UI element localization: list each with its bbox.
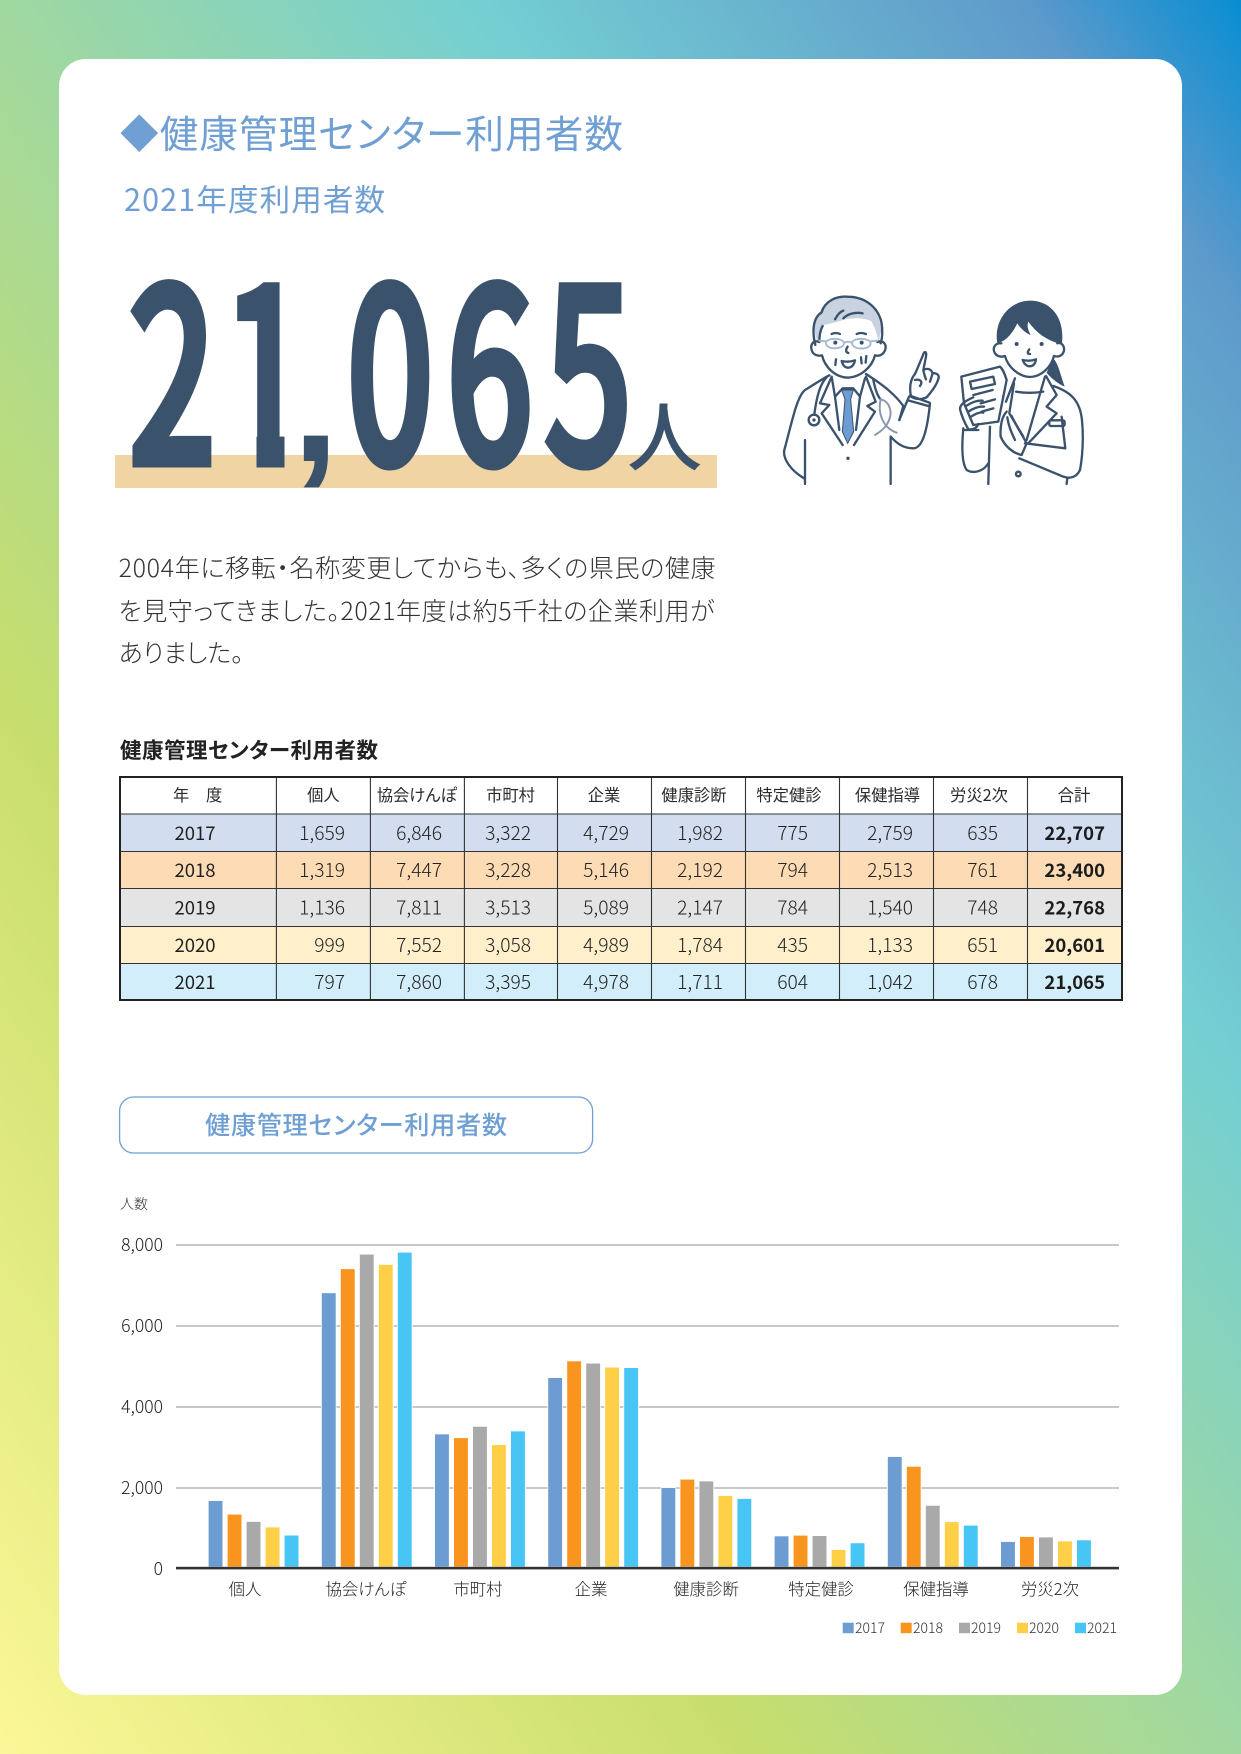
chart heading pill: 健康管理センター利用者数 <box>205 1106 507 1142</box>
row 2017 <box>174 818 1105 846</box>
row 2018: 2,513 <box>867 855 913 883</box>
bars: 個人 <box>208 1501 299 1567</box>
y axis labels: 2,000 <box>121 1475 163 1500</box>
y axis labels: 8,000 <box>121 1232 163 1257</box>
row 2018 <box>174 855 1105 883</box>
intro paragraph: 2004年に移転・名称変更してからも、多くの県民の健康 <box>119 549 716 585</box>
row 2017: 2017 <box>174 820 216 846</box>
category labels: 企業 <box>575 1576 607 1600</box>
row 2017: 6,846 <box>396 818 442 846</box>
header row: 市町村 <box>486 782 535 806</box>
row backgrounds <box>120 777 1122 1000</box>
x axis baseline <box>176 1567 1119 1569</box>
row 2020: 3,058 <box>485 930 531 958</box>
row 2017: 2,759 <box>867 818 913 846</box>
bars: 市町村 <box>435 1426 525 1567</box>
header row: 合計 <box>1058 782 1090 806</box>
row 2020: 7,552 <box>396 930 442 958</box>
bars: 特定健診 <box>774 1535 865 1567</box>
row 2018: 3,228 <box>485 855 531 883</box>
row 2021: 3,395 <box>485 967 531 995</box>
row 2017: 775 <box>777 818 808 846</box>
header row: 労災2次 <box>950 782 1008 806</box>
row 2021: 2021 <box>174 969 216 995</box>
row 2020: 20,601 <box>1044 932 1105 958</box>
row 2021: 4,978 <box>583 967 629 995</box>
legend <box>843 1618 1117 1638</box>
category labels: 協会けんぽ <box>326 1576 407 1600</box>
row 2019: 22,768 <box>1044 894 1105 920</box>
row 2020: 1,784 <box>677 930 723 958</box>
data table <box>120 777 1122 1000</box>
legend: 2017 <box>855 1618 885 1638</box>
y axis labels: 6,000 <box>121 1313 163 1338</box>
row 2020: 1,133 <box>867 930 913 958</box>
row 2020 <box>174 930 1105 958</box>
row 2020: 4,989 <box>583 930 629 958</box>
legend: 2020 <box>1029 1618 1059 1638</box>
bar chart <box>120 1194 1119 1638</box>
intro paragraph: を見守ってきました。2021年度は約5千社の企業利用が <box>119 592 715 628</box>
category labels: 健康診断 <box>673 1576 739 1600</box>
category labels: 個人 <box>229 1576 261 1600</box>
row 2019: 3,513 <box>485 892 531 920</box>
row 2021: 1,042 <box>867 967 913 995</box>
row 2020: 2020 <box>174 932 216 958</box>
unit: person: 人 <box>627 378 702 487</box>
row 2018: 794 <box>777 855 808 883</box>
row 2021: 21,065 <box>1044 969 1105 995</box>
row 2019: 1,540 <box>867 892 913 920</box>
row 2019: 748 <box>967 892 998 920</box>
illustration: doctor and nurse <box>784 297 1083 484</box>
number 21,065: 2065 <box>130 189 631 530</box>
legend: 2021 <box>1087 1618 1117 1638</box>
number 21,065: , <box>292 308 339 498</box>
row 2019: 7,811 <box>396 892 442 920</box>
row 2018: 23,400 <box>1044 857 1105 883</box>
row 2021: 678 <box>967 967 998 995</box>
row 2019: 2,147 <box>677 892 723 920</box>
subtitle: 2021 fiscal year users: 2021年度利用者数 <box>124 176 385 220</box>
row 2017: 1,659 <box>299 818 345 846</box>
row 2021 <box>174 967 1105 995</box>
number 21,065: 1 <box>223 189 308 530</box>
category labels: 労災2次 <box>1021 1576 1079 1600</box>
row 2018: 2,192 <box>677 855 723 883</box>
row 2017: 4,729 <box>583 818 629 846</box>
legend: 2019 <box>971 1618 1001 1638</box>
bars: 企業 <box>548 1361 638 1567</box>
row 2018: 1,319 <box>299 855 345 883</box>
category labels: 市町村 <box>453 1576 503 1600</box>
header row: 協会けんぽ <box>377 782 458 806</box>
highlight bar <box>115 455 717 488</box>
y axis labels: 4,000 <box>121 1394 163 1419</box>
row 2017: 3,322 <box>485 818 531 846</box>
row 2021: 604 <box>777 967 808 995</box>
table heading: 健康管理センター利用者数 <box>120 734 378 765</box>
row 2018: 761 <box>967 855 998 883</box>
row 2019: 2019 <box>174 894 216 920</box>
header row: 健康診断 <box>661 782 727 806</box>
doctor <box>784 297 939 484</box>
legend: 2018 <box>913 1618 943 1638</box>
header row: 保健指導 <box>855 782 920 806</box>
number 21,065 <box>130 279 627 488</box>
intro paragraph <box>119 549 716 670</box>
row 2017: 22,707 <box>1044 820 1105 846</box>
header row: 企業 <box>588 782 620 806</box>
row 2019: 5,089 <box>583 892 629 920</box>
bars: 協会けんぽ <box>321 1252 412 1567</box>
row 2018: 5,146 <box>583 855 629 883</box>
row 2019: 784 <box>777 892 808 920</box>
category labels <box>229 1576 1079 1600</box>
category labels: 保健指導 <box>903 1576 969 1600</box>
row 2019 <box>174 892 1105 920</box>
row 2020: 999 <box>314 930 345 958</box>
bars: 保健指導 <box>887 1457 978 1567</box>
bars: 労災2次 <box>1001 1537 1091 1567</box>
row 2020: 651 <box>967 930 998 958</box>
big number callout <box>115 279 717 488</box>
y axis unit: 人数 <box>120 1194 148 1214</box>
row 2017: 1,982 <box>677 818 723 846</box>
category labels: 特定健診 <box>788 1576 854 1600</box>
nurse <box>960 301 1083 484</box>
y axis labels: 0 <box>154 1556 163 1581</box>
row 2020: 435 <box>777 930 808 958</box>
header row <box>173 782 1090 806</box>
title: ◆健康管理センター利用者数 <box>120 104 623 160</box>
row 2021: 7,860 <box>396 967 442 995</box>
row 2021: 797 <box>314 967 345 995</box>
bars: 健康診断 <box>661 1479 752 1567</box>
row 2021: 1,711 <box>677 967 723 995</box>
row 2017: 635 <box>967 818 998 846</box>
header row: 個人 <box>307 782 340 806</box>
y axis labels <box>121 1232 163 1581</box>
intro paragraph: ありました。 <box>119 634 244 670</box>
gridlines <box>176 1245 1119 1488</box>
row 2018: 7,447 <box>396 855 442 883</box>
header row: 年 度 <box>173 782 222 806</box>
row 2019: 1,136 <box>299 892 345 920</box>
row 2018: 2018 <box>174 857 216 883</box>
chart heading pill <box>120 1097 593 1153</box>
header row: 特定健診 <box>756 782 822 806</box>
